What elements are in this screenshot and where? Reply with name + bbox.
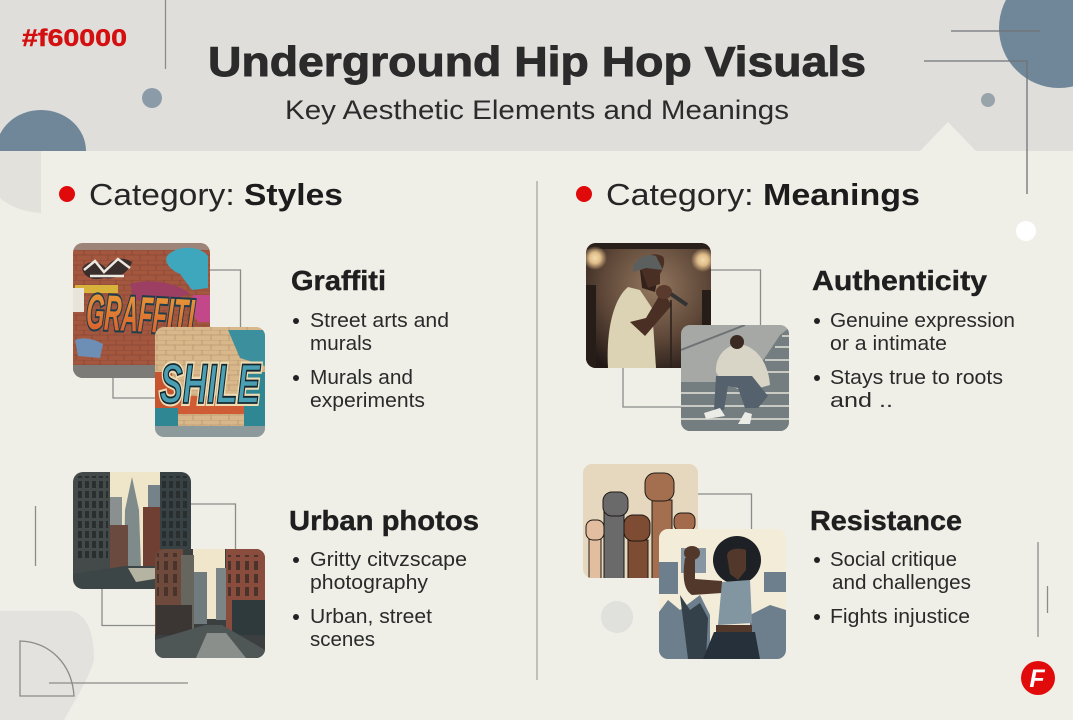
text block: resistance: Resistance (810, 505, 962, 536)
subtitle: Key Aesthetic Elements and Meanings (285, 95, 789, 125)
text block: authenticity: Genuine expression (830, 309, 1015, 332)
urban photo 2 (155, 549, 265, 658)
category heading: styles: Category: Styles (89, 178, 343, 212)
decorative header shapes (0, 0, 1073, 241)
header band (0, 0, 1073, 213)
text block: authenticity: and .. (830, 389, 893, 412)
graffiti photo 2 (155, 327, 265, 437)
authenticity photo 1 (583, 243, 715, 368)
text block: graffiti: Street arts and (310, 309, 449, 332)
bottom-left decoration (0, 506, 188, 720)
text block: authenticity: or a intimate (830, 332, 947, 355)
text block: authenticity: Authenticity (812, 265, 988, 296)
graffiti photo 2: SHILE (160, 352, 261, 415)
text block: urban photos: Gritty citvzscape (310, 548, 467, 571)
decorative circle (601, 601, 633, 633)
category heading: meanings: Category: Meanings (606, 178, 920, 212)
graffiti photo 1: GRAFFITI (85, 284, 196, 345)
text block: authenticity: Stays true to roots (830, 366, 1003, 389)
text block: graffiti (291, 265, 449, 412)
centre divider (536, 181, 538, 680)
text block: urban photos: Urban, street (310, 605, 432, 628)
image pair: resistance (583, 464, 786, 659)
text block: graffiti: Murals and (310, 366, 413, 389)
urban photo 1 (73, 472, 191, 589)
text block: urban photos: Urban photos (289, 505, 479, 536)
authenticity photo 2 (681, 325, 789, 431)
image pair: authenticity (583, 243, 789, 431)
logo (1021, 661, 1055, 695)
text block: graffiti: murals (310, 332, 372, 355)
resistance photo 1 (583, 464, 698, 580)
panel: styles (59, 178, 479, 658)
text block: graffiti: experiments (310, 389, 425, 412)
text block: resistance: and challenges (832, 571, 971, 594)
text block: urban photos (289, 505, 479, 651)
text block: resistance: Social critique (830, 548, 957, 571)
logo: F (1029, 665, 1045, 693)
text block: resistance: Fights injustice (830, 605, 970, 628)
text block: resistance (810, 505, 971, 628)
text block: urban photos: photography (310, 571, 429, 594)
text block: graffiti: Graffiti (291, 265, 386, 296)
text block: urban photos: scenes (310, 628, 375, 651)
image pair: graffiti (73, 243, 265, 437)
resistance photo 2 (659, 529, 786, 659)
brand tag: #f60000 (22, 25, 127, 52)
graffiti photo 2: SHILE (160, 352, 261, 415)
image pair: urban photos (73, 472, 265, 658)
bottom-right decoration (1038, 542, 1048, 637)
text block: authenticity (812, 265, 1015, 412)
graffiti photo 1 (73, 243, 210, 378)
panel: meanings (576, 178, 1015, 659)
title: Underground Hip Hop Visuals (208, 38, 866, 85)
